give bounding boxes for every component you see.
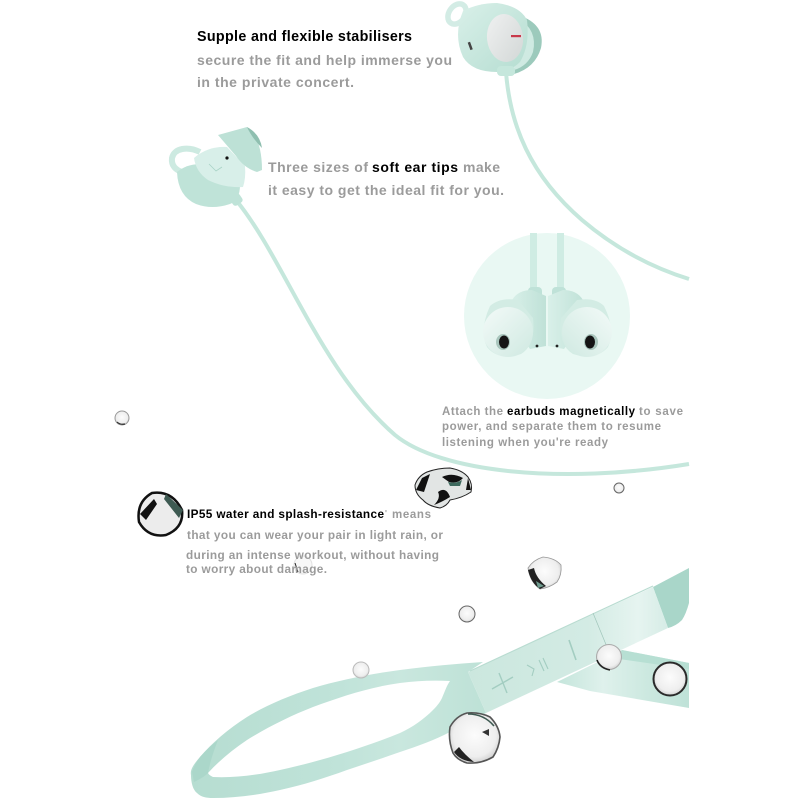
text: magnetic attach: to save: [639, 406, 683, 418]
icon: play pause button: [527, 658, 548, 676]
droplet: small left: [115, 411, 129, 425]
droplet: small centre: [459, 606, 475, 622]
text: ear tips: [268, 159, 504, 198]
water droplets: [115, 411, 686, 763]
text: ear tips: it easy to get the ideal fit for you.: [268, 182, 504, 198]
droplet: tiny right: [614, 483, 624, 493]
droplet: right band: [654, 662, 686, 696]
magnetic pair cables: [530, 233, 564, 291]
neckband: control strip: [468, 586, 668, 713]
droplet: metallic: [415, 468, 472, 508]
text: water resistance: to worry about damage.: [186, 562, 327, 576]
droplet: on strip: [596, 644, 622, 670]
text: magnetic attach: listening when you're ready: [442, 437, 609, 449]
stabilisers heading: Supple and flexible stabilisers: [197, 29, 412, 45]
text: water resistance: during an intense workout, without having: [186, 548, 439, 562]
text: magnetic attach: Attach the: [442, 406, 503, 418]
magnetic earbuds pair: [483, 287, 612, 357]
text: water resistance: ': [385, 509, 387, 518]
text: water resistance: [186, 507, 443, 576]
text: ear tips: soft ear tips: [372, 159, 458, 175]
droplet: right of text: [528, 557, 561, 589]
icon: left earbud: [172, 127, 262, 207]
droplet: on loop: [353, 662, 369, 678]
text: ear tips: Three sizes of: [268, 159, 368, 175]
text: water resistance: IP55 water and splash-resistance: [187, 507, 384, 521]
cable: left earbud: [236, 200, 689, 474]
droplet: large by IP55 text: [139, 493, 183, 535]
stabilisers body: in the private concert.: [197, 74, 354, 90]
text: stabilisers: [197, 29, 452, 90]
stabilisers body: secure the fit and help immerse you: [197, 52, 452, 68]
droplet: faint over text: [294, 556, 312, 574]
neckband: loop inner face: [192, 740, 218, 782]
neckband: rear band: [557, 650, 689, 708]
text: magnetic attach: earbuds magnetically: [507, 406, 636, 418]
panel: magnetic attach circle: [464, 233, 630, 399]
text: water resistance: means: [392, 509, 431, 521]
text: water resistance: that you can wear your pair in light rain, or: [187, 528, 443, 542]
text: magnetic attach: [442, 406, 683, 449]
text: ear tips: make: [463, 159, 500, 175]
droplet: large bottom: [449, 713, 500, 763]
neckband: loop: [191, 662, 486, 798]
icon: minus button: [569, 640, 576, 660]
cable: top earbud: [506, 72, 689, 279]
text: magnetic attach: power, and separate them to resume: [442, 421, 661, 433]
icon: plus button: [492, 673, 513, 693]
stabilisers body: [197, 52, 452, 90]
neckband: tail: [653, 568, 689, 628]
icon: top earbud: [444, 0, 542, 76]
